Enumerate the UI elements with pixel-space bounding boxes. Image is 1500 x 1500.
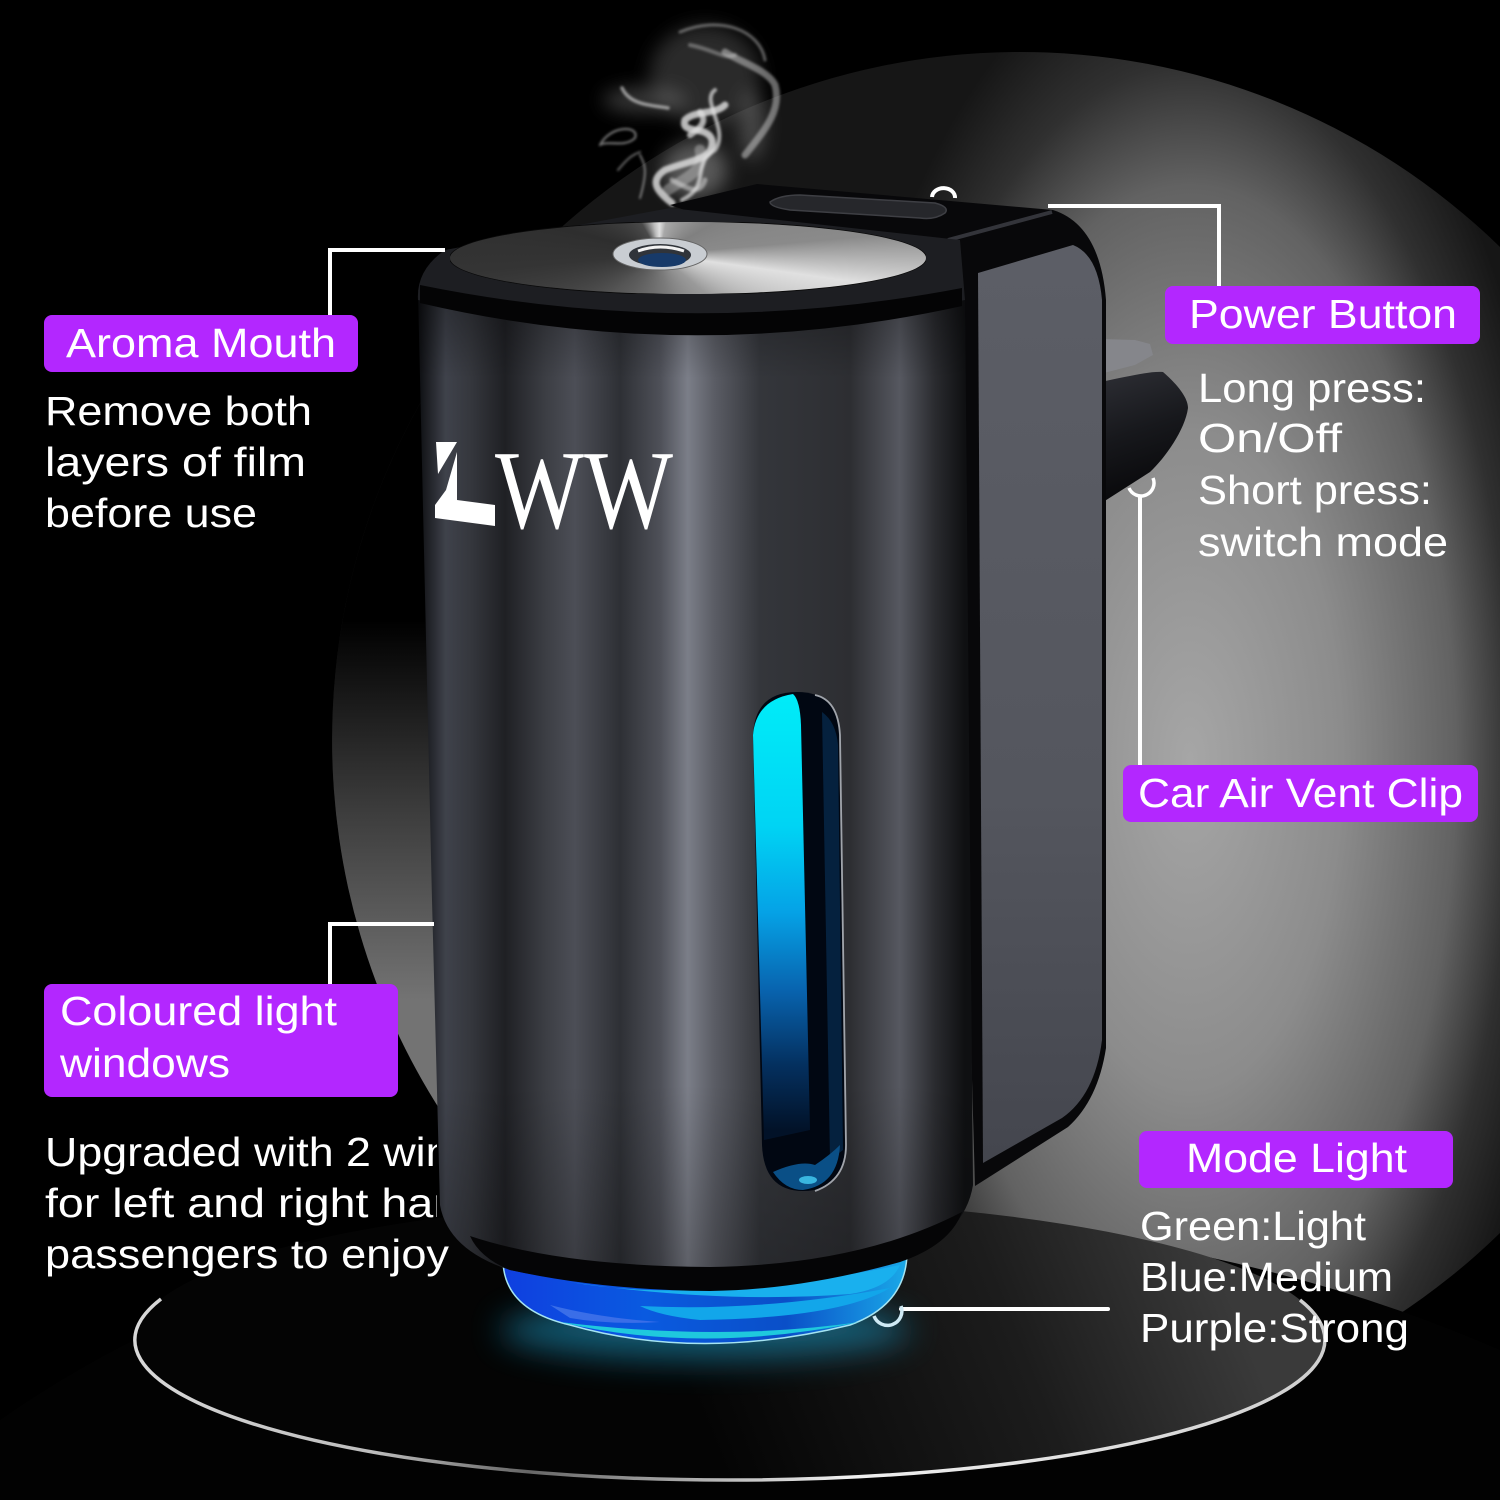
mode light description	[1140, 1203, 1409, 1351]
platform disc	[135, 1200, 1325, 1480]
shoulder bevel	[948, 212, 1052, 240]
car air vent clip hooks	[1100, 339, 1188, 504]
power button description: Short press:	[1198, 467, 1432, 513]
mode light marker	[874, 1306, 902, 1325]
power button description: switch mode	[1198, 519, 1448, 565]
brand logo LWW: WW	[495, 429, 673, 553]
mode light description: Green:Light	[1140, 1203, 1367, 1249]
lower dark floor	[0, 1210, 1500, 1500]
rim groove	[420, 285, 962, 335]
aroma mouth description	[45, 388, 312, 536]
callout: mode light	[1139, 1131, 1453, 1351]
light window	[753, 692, 846, 1191]
coloured light windows description	[46, 1136, 449, 1276]
coloured light windows description: Upgraded with 2 windows	[45, 1129, 555, 1175]
connector: power button	[1048, 206, 1219, 287]
connector: mode light	[901, 1307, 1108, 1311]
connector lines	[330, 188, 1219, 1325]
callout: car air vent clip	[1123, 765, 1478, 822]
power button description: On/Off	[1198, 415, 1343, 461]
callout: aroma mouth: Aroma Mouth	[66, 320, 336, 366]
blue mode light ring	[503, 1255, 907, 1344]
callout: power button	[1165, 286, 1480, 565]
smoke haze	[603, 25, 764, 198]
brand logo LWW	[435, 429, 673, 553]
callout: coloured light windows: Coloured light	[60, 988, 338, 1034]
aroma mouth nozzle	[613, 238, 707, 270]
bottom bevel	[470, 1212, 962, 1291]
coloured light windows description: passengers to enjoy	[45, 1231, 450, 1277]
smoke rising from aroma mouth	[600, 25, 777, 203]
clip housing and top bridge	[670, 184, 1106, 1186]
callout: aroma mouth	[44, 315, 358, 536]
callout: power button: Power Button	[1189, 291, 1457, 337]
smoke wisps	[600, 25, 777, 203]
callout: car air vent clip: Car Air Vent Clip	[1138, 770, 1463, 816]
aroma mouth description: Remove both	[45, 388, 312, 434]
device body	[418, 208, 973, 1291]
power button marker	[932, 188, 955, 198]
callout: coloured light windows: windows	[59, 1040, 230, 1086]
power button description: Long press:	[1198, 365, 1426, 411]
coloured light windows description: for left and right hand	[45, 1180, 485, 1226]
connector: air vent clip	[1138, 496, 1142, 766]
glow under device	[500, 1300, 910, 1360]
callout: mode light: Mode Light	[1186, 1135, 1408, 1181]
lid rim	[418, 208, 965, 330]
metal lid disc	[450, 222, 926, 294]
aroma mouth description: before use	[45, 490, 257, 536]
mode light description: Purple:Strong	[1140, 1305, 1409, 1351]
connector: aroma mouth	[330, 250, 445, 316]
mode light description: Blue:Medium	[1140, 1254, 1393, 1300]
power button description	[1198, 365, 1448, 565]
vent clip marker	[1129, 478, 1154, 496]
connector: coloured light windows	[330, 924, 434, 985]
callout: coloured light windows	[44, 984, 449, 1276]
power button	[770, 195, 946, 218]
clip front panel	[978, 245, 1102, 1163]
aroma mouth description: layers of film	[45, 439, 306, 485]
